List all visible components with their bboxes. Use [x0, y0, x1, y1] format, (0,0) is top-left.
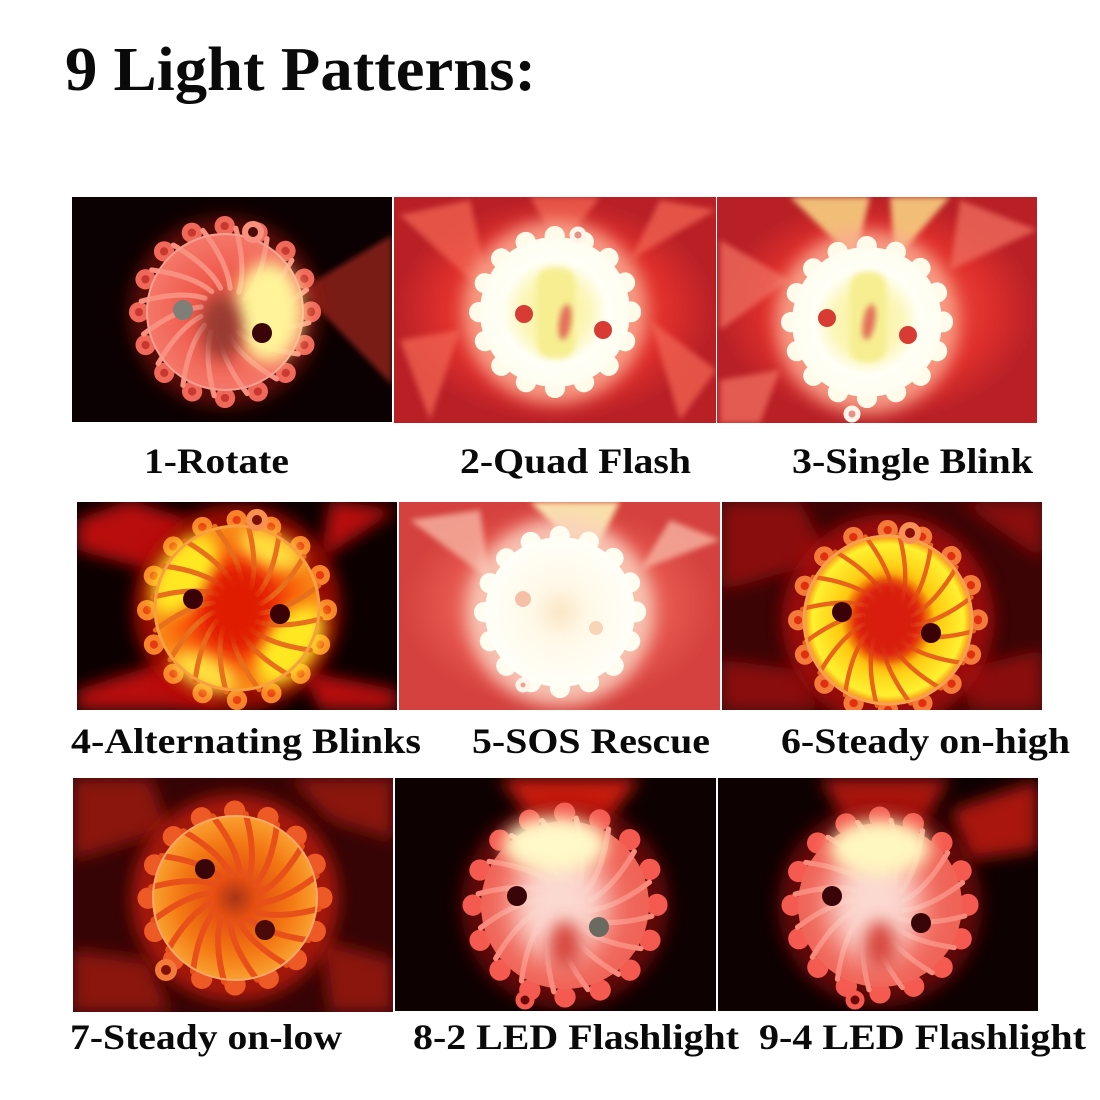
label: 8-2 LED Flashlight: 8-2 LED Flashlight — [413, 1017, 739, 1057]
label: 4-Alternating Blinks: 4-Alternating Blinks — [71, 721, 421, 761]
label: 2-Quad Flash: 2-Quad Flash — [460, 441, 691, 481]
label: 6-Steady on-high: 6-Steady on-high — [781, 721, 1070, 761]
label: 3-Single Blink: 3-Single Blink — [792, 441, 1033, 481]
panel: 7-Steady on-low photo — [73, 778, 393, 1012]
panel: 3-Single Blink photo — [717, 197, 1037, 423]
panel: 1-Rotate photo — [72, 197, 392, 422]
label: 5-SOS Rescue: 5-SOS Rescue — [472, 721, 710, 761]
panel: 6-Steady on-high photo — [722, 502, 1042, 726]
label: 9-4 LED Flashlight: 9-4 LED Flashlight — [759, 1017, 1086, 1057]
panel: 8-2 LED Flashlight photo — [395, 778, 716, 1011]
panel: 9-4 LED Flashlight photo — [718, 778, 1038, 1011]
label: 1-Rotate: 1-Rotate — [144, 441, 289, 481]
panel: 5-SOS Rescue photo — [399, 502, 720, 710]
label: 7-Steady on-low: 7-Steady on-low — [70, 1017, 342, 1057]
panel: 2-Quad Flash photo — [394, 197, 716, 423]
title: 9 Light Patterns: — [65, 36, 536, 104]
panel: 4-Alternating Blinks photo — [77, 500, 397, 712]
